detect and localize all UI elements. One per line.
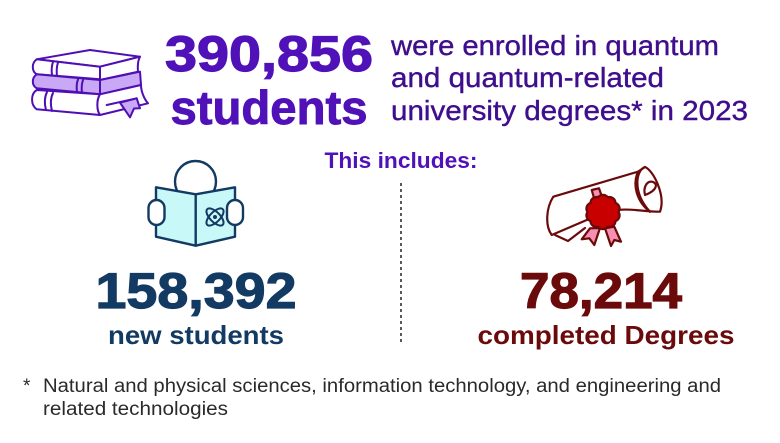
footnote: * <box>23 376 31 397</box>
headline description: were enrolled in quantum <box>390 30 719 61</box>
icon: diploma scroll with seal <box>547 167 662 246</box>
headline description <box>390 30 748 126</box>
headline label: students <box>170 81 368 134</box>
headline number: 390,856 <box>165 26 373 82</box>
headline description: and quantum-related <box>391 62 664 93</box>
headline description: university degrees* in 2023 <box>391 95 748 126</box>
left statistic number: 158,392 <box>96 263 296 319</box>
footnote <box>23 376 721 420</box>
icon: reader with atom book <box>148 161 243 246</box>
subheading: This includes: <box>324 148 478 173</box>
left statistic label: new students <box>108 320 284 350</box>
footnote: Natural and physical sciences, information technology, and engineering and <box>43 376 721 397</box>
icon: stack of books <box>32 50 148 117</box>
right statistic number: 78,214 <box>520 263 682 319</box>
divider <box>400 183 402 345</box>
footnote: related technologies <box>43 399 228 420</box>
right statistic label: completed Degrees <box>478 320 734 350</box>
